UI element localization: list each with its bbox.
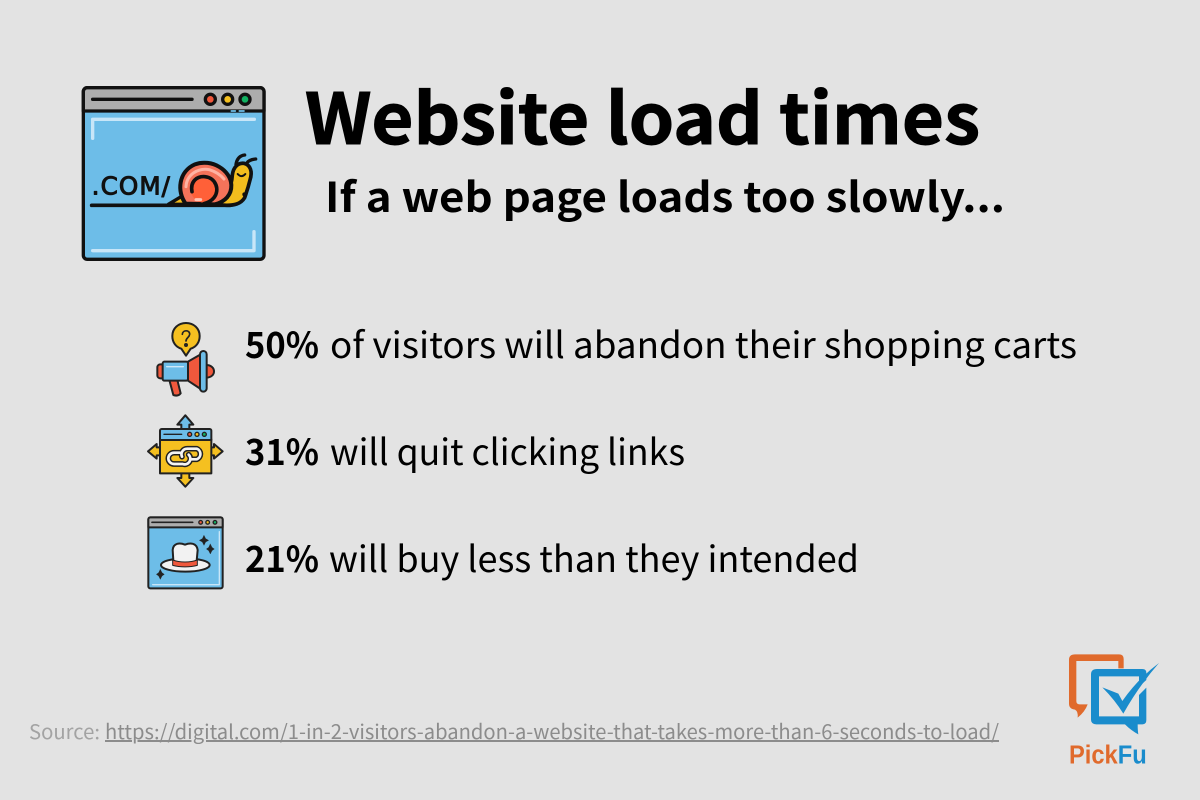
icon: browser window with hat: [148, 517, 223, 588]
source line: https://digital.com/1-in-2-visitors-abandon-a-website-that-takes-more-than-6-seconds-to-load/: [105, 716, 999, 745]
text: 50 percent abandon carts: 50%: [245, 317, 319, 369]
subtitle: If a web page loads too slowly...: [325, 164, 1005, 224]
text: 21 percent buy less: will buy less than they intended: [329, 531, 859, 583]
icon: browser window with snail: .COM/: [92, 171, 171, 200]
text: 31 percent quit clicking: 31%: [245, 424, 319, 476]
text: 21 percent buy less: 21%: [245, 531, 319, 583]
icon: link window with arrows: [148, 415, 223, 487]
PickFu logo: PickFu: [1069, 741, 1147, 769]
title: Website load times: [305, 64, 980, 165]
icon: megaphone with question bubble: [157, 323, 214, 396]
text: 31 percent quit clicking: will quit clicking links: [330, 424, 685, 476]
PickFu logo: [1069, 654, 1159, 769]
icon: browser window with snail: [83, 88, 264, 259]
source line: Source:: [29, 716, 100, 745]
text: 50 percent abandon carts: of visitors will abandon their shopping carts: [330, 317, 1077, 369]
